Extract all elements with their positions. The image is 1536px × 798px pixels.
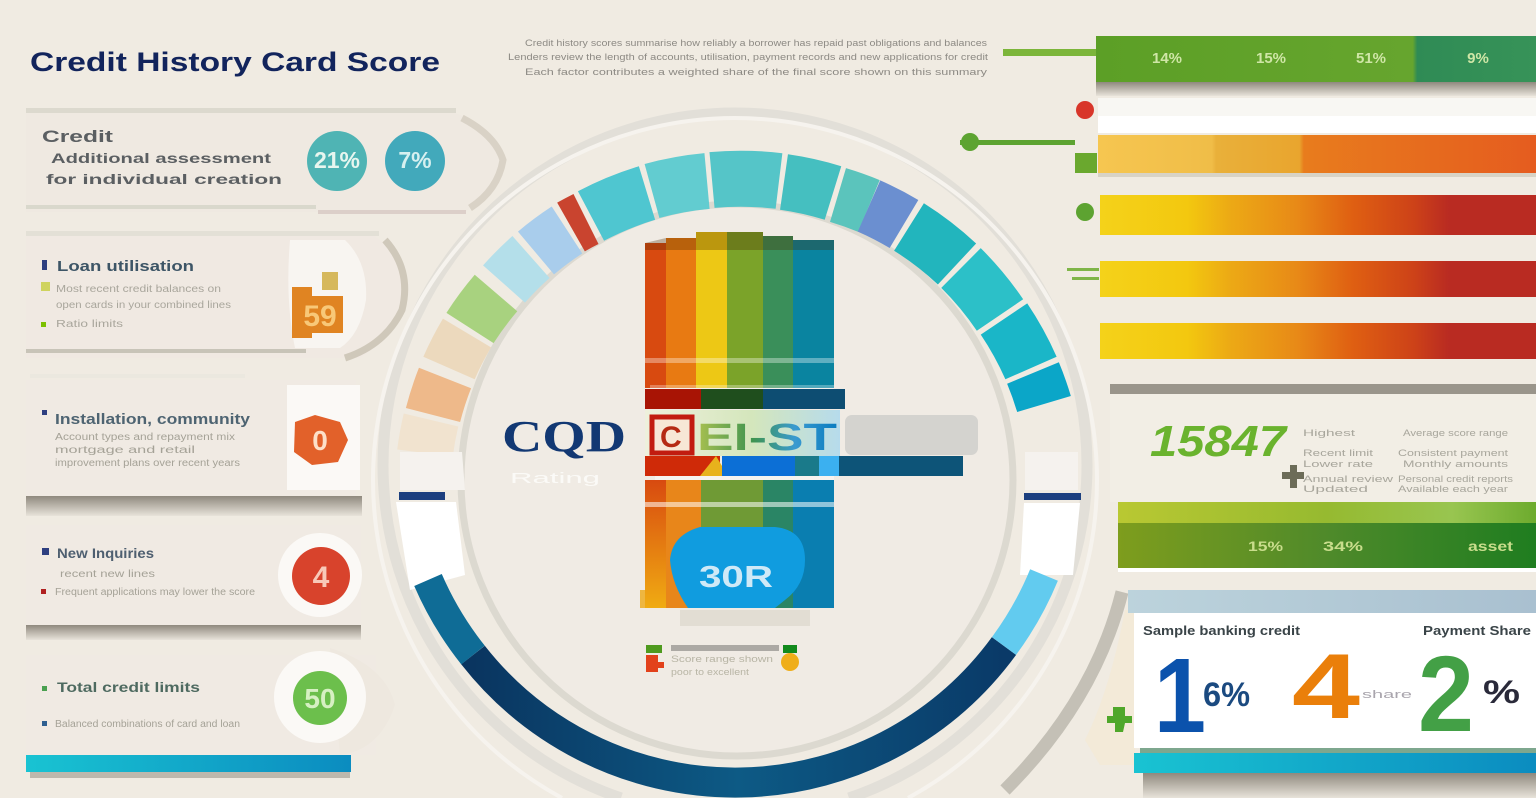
panel: credit mix: Total credit limits bbox=[57, 679, 200, 695]
text: overview copy: Credit bbox=[42, 127, 113, 146]
intro text block bbox=[508, 38, 989, 77]
text: summary columns: Average score range bbox=[1403, 428, 1508, 438]
legend under column: Score range shown bbox=[671, 654, 773, 664]
intro text block: Credit history scores summarise how reliably a borrower has repaid past obligations and balances bbox=[525, 38, 988, 48]
text: summary columns: Personal credit reports bbox=[1398, 474, 1514, 484]
panel: new credit bbox=[26, 525, 362, 640]
panel: history accounts: mortgage and retail bbox=[55, 445, 195, 456]
text: summary columns: Consistent payment bbox=[1398, 448, 1509, 458]
title: Credit History Card Score bbox=[30, 47, 440, 77]
blue score pill: 30R bbox=[699, 559, 773, 594]
text: key headers bbox=[1143, 623, 1531, 638]
heat bar 3 bbox=[1067, 261, 1536, 297]
stat: 2 %: 2 bbox=[1418, 633, 1474, 754]
heat bar 1 with marker bbox=[960, 98, 1536, 177]
text: highlighted label: EI-ST bbox=[697, 417, 837, 459]
panel: history accounts: Installation, community bbox=[55, 411, 251, 428]
panel: credit mix: Balanced combinations of card and loan bbox=[55, 719, 240, 730]
text: faint sublabel: Rating bbox=[510, 470, 600, 487]
stat: 4 bbox=[1292, 636, 1412, 738]
text: CQD label: CQD bbox=[502, 412, 626, 461]
central gauge bbox=[373, 113, 1097, 798]
text: overview copy: Additional assessment bbox=[51, 150, 271, 166]
text: highlighted label: C bbox=[660, 421, 682, 454]
text: key headers: Sample banking credit bbox=[1143, 623, 1301, 638]
badge: 7 percent: 7% bbox=[398, 147, 432, 173]
right panel: header scale bar: 9% bbox=[1467, 50, 1489, 67]
icon: score tag 59 bbox=[288, 240, 366, 348]
panel: length of history: Most recent credit balances on bbox=[56, 284, 221, 295]
panel: new credit: recent new lines bbox=[60, 569, 155, 580]
panel: length of history bbox=[26, 231, 405, 358]
text: summary columns: Lower rate bbox=[1303, 459, 1373, 469]
panel: history accounts bbox=[26, 374, 362, 516]
teal footer bar bbox=[1134, 748, 1536, 798]
stat: 1 6%: 6% bbox=[1203, 676, 1250, 714]
text: summary columns: Monthly amounts bbox=[1403, 459, 1509, 469]
right panel: score summary bbox=[1110, 384, 1536, 572]
blue score pill bbox=[670, 527, 805, 608]
icon: small plus bbox=[1282, 465, 1304, 488]
panel: length of history: Ratio limits bbox=[56, 319, 123, 330]
gauge highlight ring bbox=[373, 118, 1097, 798]
text: overview copy bbox=[42, 127, 282, 187]
icon: score tag 0 bbox=[287, 385, 360, 490]
badge: 7 percent bbox=[385, 131, 445, 191]
text: summary columns: Recent limit bbox=[1303, 448, 1374, 458]
column shadow bbox=[680, 610, 810, 626]
panel: new credit: Frequent applications may lower the score bbox=[55, 587, 255, 598]
gauge outer ring bbox=[383, 113, 1087, 798]
panel: credit mix bbox=[26, 648, 395, 778]
text: summary columns: Annual review bbox=[1303, 474, 1394, 484]
icon: green plus bbox=[1107, 707, 1132, 732]
icon: score tag 50 bbox=[274, 651, 366, 743]
stat: 4: 4 bbox=[1292, 636, 1360, 738]
panel: new credit: New Inquiries bbox=[57, 545, 154, 561]
dark band bbox=[645, 389, 845, 409]
panel: length of history: open cards in your combined lines bbox=[56, 300, 231, 311]
gauge side ticks bbox=[396, 452, 1081, 590]
legend under column bbox=[646, 645, 799, 677]
text: highlighted label bbox=[645, 410, 840, 459]
badge: 21 percent: 21% bbox=[314, 147, 360, 173]
stat: 1 6% bbox=[1154, 637, 1250, 755]
grey progress pill bbox=[845, 415, 978, 455]
intro text block: Each factor contributes a weighted share of the final score shown on this summary bbox=[525, 67, 988, 77]
panel: history accounts: improvement plans over recent years bbox=[55, 458, 240, 469]
panel: history accounts: Account types and repayment mix bbox=[55, 432, 235, 443]
intro text block: Lenders review the length of accounts, utilisation, payment records and new applications for credit bbox=[508, 52, 989, 62]
icon: score tag 4: 4 bbox=[313, 561, 330, 594]
gauge lower dark arc bbox=[428, 575, 1044, 783]
gauge disc bbox=[461, 204, 1013, 756]
green range bars bbox=[1118, 502, 1536, 572]
panel: credit overview bbox=[26, 108, 503, 214]
icon: score tag 0: 0 bbox=[312, 425, 328, 456]
text: summary columns: Highest bbox=[1303, 428, 1356, 438]
stat: 4: share bbox=[1362, 689, 1412, 701]
icon: score tag 50: 50 bbox=[304, 683, 336, 714]
text: summary columns: Updated bbox=[1303, 484, 1368, 494]
right panel: key numbers bbox=[1005, 590, 1536, 798]
text: key headers: Payment Share bbox=[1423, 623, 1531, 638]
blue progress strip bbox=[645, 456, 963, 476]
green range bars: asset bbox=[1468, 538, 1513, 554]
right panel: header scale bar bbox=[1003, 36, 1536, 96]
stat: 2 % bbox=[1418, 633, 1520, 754]
stat: 1 6%: 1 bbox=[1154, 637, 1206, 755]
legend under column: poor to excellent bbox=[671, 667, 750, 677]
right panel: header scale bar: 51% bbox=[1356, 50, 1386, 67]
heat bar 2 bbox=[1076, 195, 1536, 235]
icon: score tag 4 bbox=[278, 533, 362, 617]
right panel: header scale bar: 14% bbox=[1152, 50, 1182, 67]
stat: 2 %: % bbox=[1483, 674, 1520, 710]
figure: 15847: 15847 bbox=[1150, 417, 1289, 466]
text: summary columns: Available each year bbox=[1398, 484, 1508, 494]
teal footer bar bbox=[26, 755, 351, 778]
rainbow score column bbox=[640, 232, 978, 608]
green range bars: 34% bbox=[1323, 538, 1364, 554]
text: overview copy: for individual creation bbox=[46, 171, 282, 187]
icon: score tag 59: 59 bbox=[303, 300, 337, 333]
gauge score segments bbox=[425, 179, 1044, 453]
panel: length of history: Loan utilisation bbox=[57, 258, 194, 275]
heat bar 4 bbox=[1100, 323, 1536, 359]
right panel: header scale bar: 15% bbox=[1256, 50, 1286, 67]
lower stripes bbox=[640, 480, 834, 608]
text: summary columns bbox=[1303, 428, 1514, 494]
badge: 21 percent bbox=[307, 131, 367, 191]
green range bars: 15% bbox=[1248, 538, 1284, 554]
